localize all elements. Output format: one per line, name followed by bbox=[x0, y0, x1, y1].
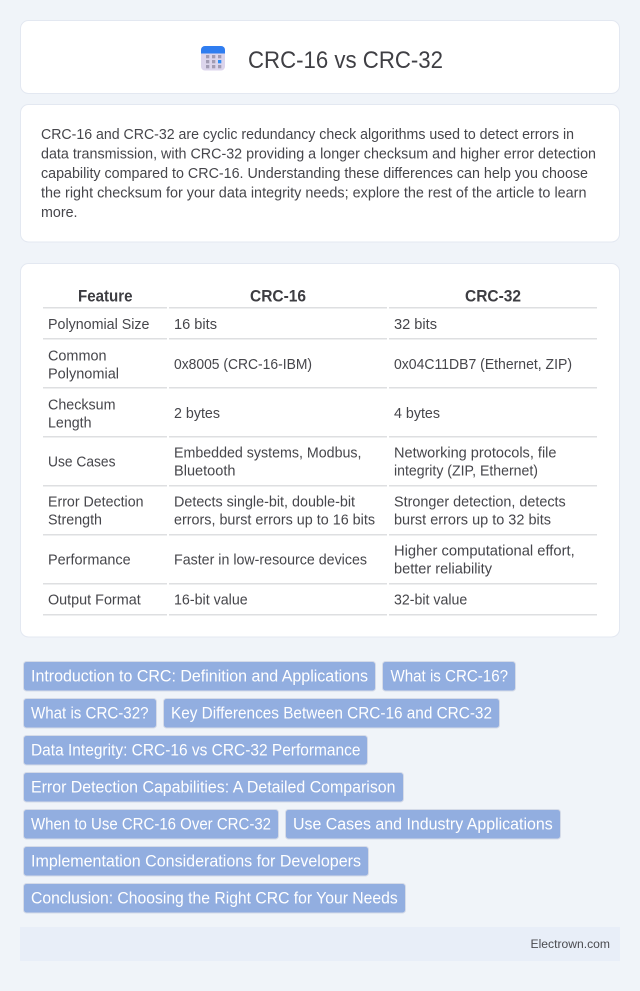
chip: when to use bbox=[24, 810, 278, 839]
row: performance: Performance bbox=[48, 552, 131, 568]
chip: error detection: Error Detection Capabilities: A Detailed Comparison bbox=[31, 779, 396, 797]
row: checksum length: 2 bytes bbox=[174, 406, 220, 422]
icon: calendar bbox=[201, 46, 225, 70]
intro paragraph: data transmission, with CRC-32 providing a longer checksum and higher error detection bbox=[41, 146, 596, 162]
chip: what is CRC-32 bbox=[24, 698, 156, 728]
row: output format: 32-bit value bbox=[394, 593, 467, 609]
row: performance: Higher computational effort, bbox=[394, 544, 575, 560]
row: common polynomial: 0x04C11DB7 (Ethernet, ZIP) bbox=[394, 357, 572, 373]
chip: introduction: Introduction to CRC: Definition and Applications bbox=[31, 668, 368, 686]
chip: implementation: Implementation Considerations for Developers bbox=[31, 853, 361, 871]
row: error detection strength: Strength bbox=[48, 513, 102, 529]
row: checksum length bbox=[48, 398, 440, 432]
row: use cases bbox=[48, 446, 556, 480]
row: error detection strength: Stronger detection, detects bbox=[394, 495, 566, 511]
row: checksum length: 4 bytes bbox=[394, 406, 440, 422]
row: use cases: Networking protocols, file bbox=[394, 446, 556, 462]
row: error detection strength bbox=[48, 495, 566, 529]
row: checksum length: Length bbox=[48, 416, 92, 432]
chip: what is CRC-16: What is CRC-16? bbox=[390, 668, 508, 686]
row: common polynomial: 0x8005 (CRC-16-IBM) bbox=[174, 357, 312, 373]
row: common polynomial bbox=[48, 348, 572, 382]
row: error detection strength: errors, burst errors up to 16 bits bbox=[174, 513, 375, 529]
chip: what is CRC-16 bbox=[382, 662, 516, 691]
table header row: CRC-32 bbox=[465, 288, 521, 306]
chip: conclusion: Conclusion: Choosing the Right CRC for Your Needs bbox=[31, 890, 398, 908]
row: output format: 16-bit value bbox=[174, 593, 248, 609]
chip: implementation bbox=[24, 846, 368, 876]
row: polynomial size bbox=[48, 317, 437, 333]
row: polynomial size: 32 bits bbox=[394, 317, 437, 333]
table header row bbox=[78, 288, 521, 306]
chip: use cases: Use Cases and Industry Applications bbox=[293, 816, 553, 834]
row: common polynomial: Common bbox=[48, 348, 106, 364]
chip: conclusion bbox=[24, 884, 406, 913]
table header row: Feature bbox=[78, 288, 132, 306]
row: polynomial size: Polynomial Size bbox=[48, 317, 150, 333]
footer credit: Electrown.com bbox=[530, 937, 610, 951]
row: polynomial size: 16 bits bbox=[174, 317, 217, 333]
intro paragraph: the right checksum for your data integrity needs; explore the rest of the article to learn bbox=[41, 186, 586, 202]
footer bbox=[20, 927, 620, 961]
row: checksum length: Checksum bbox=[48, 398, 116, 414]
intro paragraph: capability compared to CRC-16. Understanding these differences can help you choose bbox=[41, 166, 588, 182]
chip: what is CRC-32: What is CRC-32? bbox=[31, 705, 148, 723]
panel: comparison table bbox=[20, 264, 620, 637]
chip: error detection bbox=[24, 772, 404, 802]
chip: key differences: Key Differences Between CRC-16 and CRC-32 bbox=[171, 705, 492, 723]
panel: introduction bbox=[20, 104, 620, 242]
row: use cases: integrity (ZIP, Ethernet) bbox=[394, 464, 538, 480]
row: performance: Faster in low-resource devices bbox=[174, 552, 367, 568]
row: use cases: Bluetooth bbox=[174, 464, 236, 480]
chip: key differences bbox=[164, 698, 500, 728]
chip: data integrity bbox=[24, 736, 368, 765]
title: CRC-16 vs CRC-32 bbox=[248, 47, 443, 74]
row: use cases: Use Cases bbox=[48, 455, 116, 471]
row: error detection strength: Error Detection bbox=[48, 495, 144, 511]
chip: introduction bbox=[24, 662, 376, 691]
topic links bbox=[24, 662, 560, 913]
row: performance bbox=[48, 544, 575, 578]
row: performance: better reliability bbox=[394, 562, 493, 578]
intro paragraph bbox=[41, 127, 596, 221]
intro paragraph: CRC-16 and CRC-32 are cyclic redundancy check algorithms used to detect errors in bbox=[41, 127, 574, 143]
chip: when to use: When to Use CRC-16 Over CRC-32 bbox=[31, 816, 271, 834]
table header row: CRC-16 bbox=[250, 288, 306, 306]
row: common polynomial: Polynomial bbox=[48, 366, 119, 382]
row: error detection strength: burst errors up to 32 bits bbox=[394, 513, 551, 529]
row: output format bbox=[48, 593, 467, 609]
row: use cases: Embedded systems, Modbus, bbox=[174, 446, 362, 462]
header panel bbox=[20, 20, 620, 94]
chip: use cases bbox=[286, 810, 560, 839]
chip: data integrity: Data Integrity: CRC-16 vs CRC-32 Performance bbox=[31, 742, 360, 760]
row: output format: Output Format bbox=[48, 593, 141, 609]
intro paragraph: more. bbox=[41, 205, 78, 221]
table rules bbox=[43, 307, 597, 616]
row: error detection strength: Detects single-bit, double-bit bbox=[174, 495, 355, 511]
